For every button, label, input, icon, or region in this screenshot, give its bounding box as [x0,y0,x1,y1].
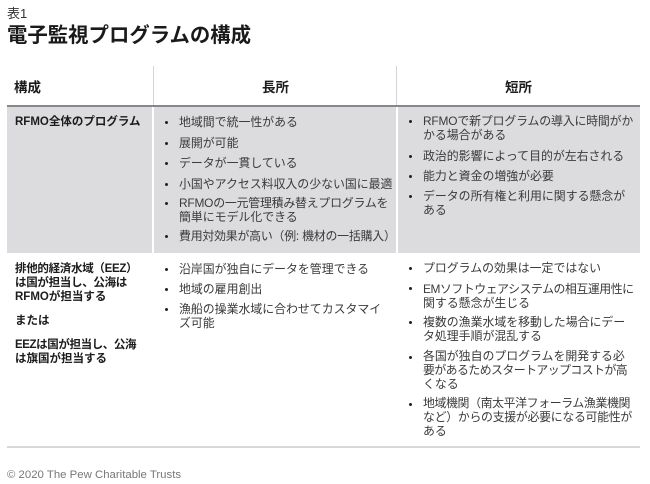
disadvantage item [423,349,627,391]
cell: disadvantages [398,107,640,253]
disadvantages list: ある [423,424,447,438]
disadvantage item: 複数の漁業水域を移動した場合にデー [423,315,625,329]
disadvantage item [423,282,634,310]
advantage item [179,302,381,330]
advantages list: ズ可能 [179,316,215,330]
or: または [15,315,50,327]
header: advantages: 長所 [262,80,289,95]
disadvantages list: くなる [423,377,459,391]
advantage item: 地域間で統一性がある [179,115,298,129]
header column divider right [396,66,397,105]
header: disadvantages: 短所 [505,80,532,95]
cell: advantages: 簡単にモデル化できる [179,210,298,224]
advantage item: 展開が可能 [179,136,238,150]
header: configuration: 構成 [14,80,41,95]
header row [7,66,640,107]
configuration label: RFMO全体のプログラム [15,116,141,128]
disadvantage item [423,396,632,438]
advantage item: 漁船の操業水域に合わせてカスタマイ [179,302,381,316]
disadvantage item [423,114,633,142]
advantage item: 小国やアクセス料収入の少ない国に最適 [179,177,392,191]
title: 電子監視プログラムの構成 [7,25,251,47]
header column divider left [153,66,154,105]
advantage item: 費用対効果が高い（例: 機材の一括購入） [179,229,396,243]
disadvantages list: など）からの支援が必要になる可能性が [423,410,632,424]
advantage item: データが一貫している [179,156,298,170]
disadvantages list: 要があるためスタートアップコストが高 [423,363,627,377]
advantage item: 地域の雇用創出 [179,282,262,296]
option one: は国が担当し、公海は [15,277,127,289]
cell: advantages [154,107,396,253]
disadvantage item: 各国が独自のプログラムを開発する必 [423,349,625,363]
disadvantage item: 地域機関（南太平洋フォーラム漁業機関 [423,396,630,410]
bottom rule [7,446,640,448]
table label: 表1 [7,6,27,21]
row 2: EEZ / high seas program [7,261,640,448]
option one: RFMOが担当する [15,291,106,303]
disadvantage item [423,189,625,217]
disadvantages list: 関する懸念が生じる [423,296,530,310]
disadvantage item: RFMOで新プログラムの導入に時間がか [423,114,633,128]
disadvantage item: EMソフトウェアシステムの相互運用性に [423,282,634,296]
disadvantage item [423,315,625,343]
advantages list [165,262,381,330]
disadvantages list [409,261,634,438]
advantage item: RFMOの一元管理積み替えプログラムを [179,196,388,210]
disadvantage item: 能力と資金の増強が必要 [423,169,554,183]
option two: は旗国が担当する [15,353,107,365]
option one: 排他的経済水域（EEZ） [15,263,137,275]
option two [15,338,136,365]
advantage item: 沿岸国が独自にデータを管理できる [179,262,369,276]
disadvantage item: プログラムの効果は一定ではない [423,261,601,275]
option one [15,262,137,303]
cell: disadvantages: ある [423,203,447,217]
option two: EEZは国が担当し、公海 [15,339,136,351]
disadvantage item: 政治的影響によって目的が左右される [423,149,624,163]
advantage item [179,196,388,224]
row 1: RFMO-wide program [7,107,640,253]
footer credit: © 2020 The Pew Charitable Trusts [7,469,181,481]
disadvantages list: タ処理手順が混乱する [423,329,542,343]
configuration text [15,262,137,365]
cell: configuration [7,107,152,253]
header rule [7,105,640,107]
cell: disadvantages: かる場合がある [423,128,506,142]
disadvantage item: データの所有権と利用に関する懸念が [423,189,625,203]
